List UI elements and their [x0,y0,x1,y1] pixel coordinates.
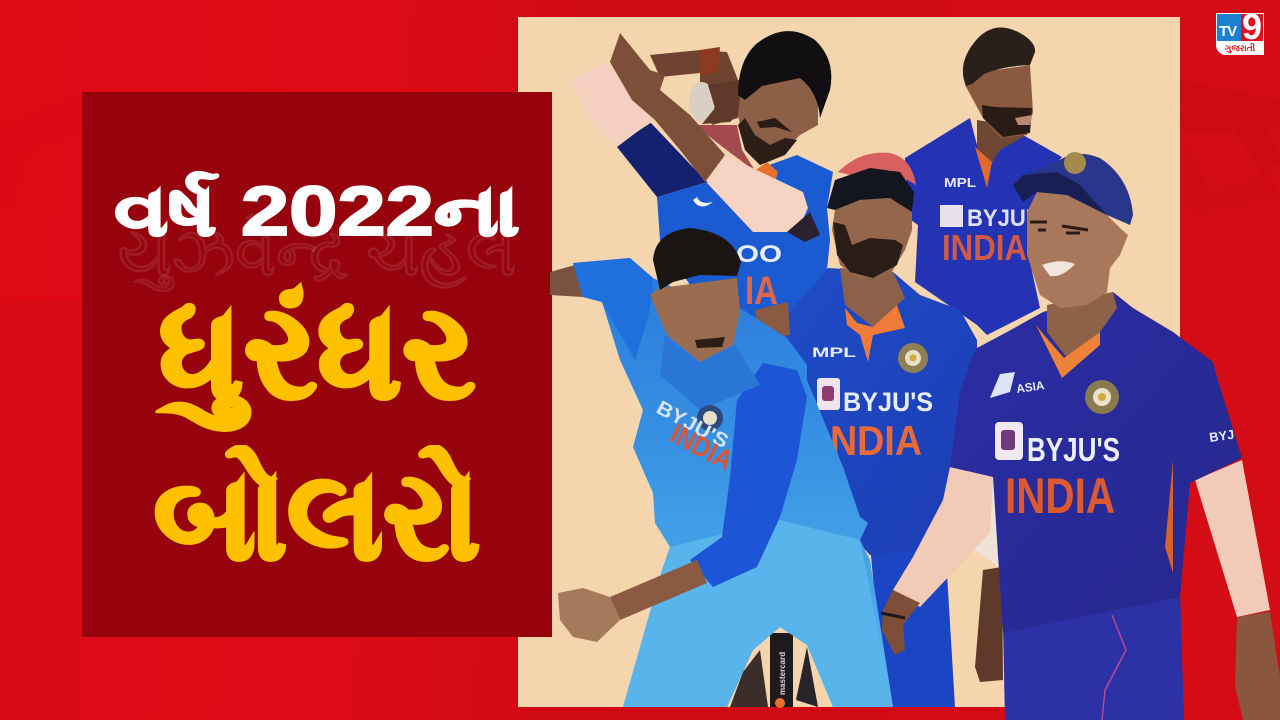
jersey and trousers [573,258,893,707]
team name: INDIA [665,418,738,476]
collar stripe [975,147,992,188]
moustache [695,337,725,348]
collar [1036,325,1100,378]
heading: yellow line one: ધુરંધર [159,279,475,425]
maroon patch [695,125,756,172]
collar [753,162,778,182]
sponsor box [995,422,1023,460]
sunglasses [838,153,916,185]
sponsor: BYJU'S [1027,431,1120,468]
brows and eyes [1030,222,1088,233]
lower arm [975,567,1003,682]
cap [827,168,914,212]
player: front bowler in light blue [550,228,893,707]
fist [558,588,620,642]
player: top bowler with raised arms [573,31,833,325]
neck [977,120,1027,170]
sponsor: BYJU' [967,205,1031,232]
face [1027,192,1128,308]
arm sleeve right [707,155,808,232]
player: centre bowler with cap [755,153,1003,707]
hair [963,28,1035,86]
seam [1102,615,1126,720]
team name: INDIA [942,227,1027,268]
left arm [550,265,583,297]
neck [1047,292,1117,358]
wrist strap [881,613,905,618]
beard [833,222,903,278]
long sleeve arm [690,363,807,587]
collar [660,335,760,410]
mouth [1015,115,1032,125]
sleeve sponsor: BYJ [1208,427,1235,445]
jersey [905,118,1062,335]
left hand [882,590,920,655]
sponsor: OO [736,241,782,268]
beard [738,118,797,165]
cap brim [1013,172,1107,215]
shoulder sleeve [573,258,653,360]
stump advert: mastercard [778,652,787,695]
forearm to fist [650,50,742,125]
crest [898,343,928,373]
right sleeve [1195,460,1270,617]
stump logo [775,698,785,708]
ball [689,82,715,122]
jersey [783,268,978,555]
collar [845,305,905,362]
logo lettering: TV [1219,23,1236,40]
logo red block [1241,14,1263,41]
sponsor: BYJU'S [653,397,732,453]
sponsor box [817,378,840,410]
jersey [657,155,833,325]
sponsor: BYJU'S [843,387,933,417]
smile [1042,261,1075,276]
title panel [82,92,552,637]
player: top right bowler [905,28,1062,335]
nike swoosh [693,197,713,207]
player: front right bowler with cap [881,152,1280,720]
sponsor box mark [1001,430,1015,450]
hand and forearm [610,33,725,182]
maker: MPL [944,175,976,190]
trousers [1003,590,1184,720]
bandaged arm [975,470,1000,568]
side stripe [1165,460,1173,573]
team name: IA [745,269,778,313]
sponsor box mark [822,386,834,401]
asia cup mark: ASIA [1015,378,1045,396]
stumps [730,633,818,708]
cap [1013,154,1133,225]
maker: MPL [812,344,857,360]
hair [653,228,741,290]
beard [982,105,1032,137]
face [650,278,740,362]
logo Gujarati label: ગુજરાતી [1225,43,1255,53]
face [832,198,912,280]
forearm [610,560,707,620]
cap crest [1064,152,1086,174]
jersey [950,292,1242,633]
wristband [700,47,720,75]
navy sleeve [617,122,707,197]
fist [702,80,743,124]
logo blue block [1217,14,1241,41]
neck [840,268,905,327]
arm sleeve left [573,63,652,145]
shorts [870,540,955,707]
left sleeve [893,467,993,607]
shirt crest [1085,380,1119,414]
team name: NDIA [830,417,922,464]
beige backdrop panel [518,17,1180,707]
sleeve band [787,212,820,242]
team name: INDIA [1005,468,1115,524]
heading: yellow line two: બોલરો [154,448,480,584]
crest [697,405,723,431]
face [738,70,818,165]
face [965,65,1033,138]
trouser highlight [623,520,893,707]
right forearm [1235,612,1280,720]
hair [738,31,831,118]
lion mark [990,372,1015,398]
moustache [757,118,792,132]
hand [755,302,790,338]
sponsor box [940,205,963,227]
logo: TV9 Gujarati [1216,13,1264,55]
heading: year line: વર્ષ 2022ના [114,172,520,250]
